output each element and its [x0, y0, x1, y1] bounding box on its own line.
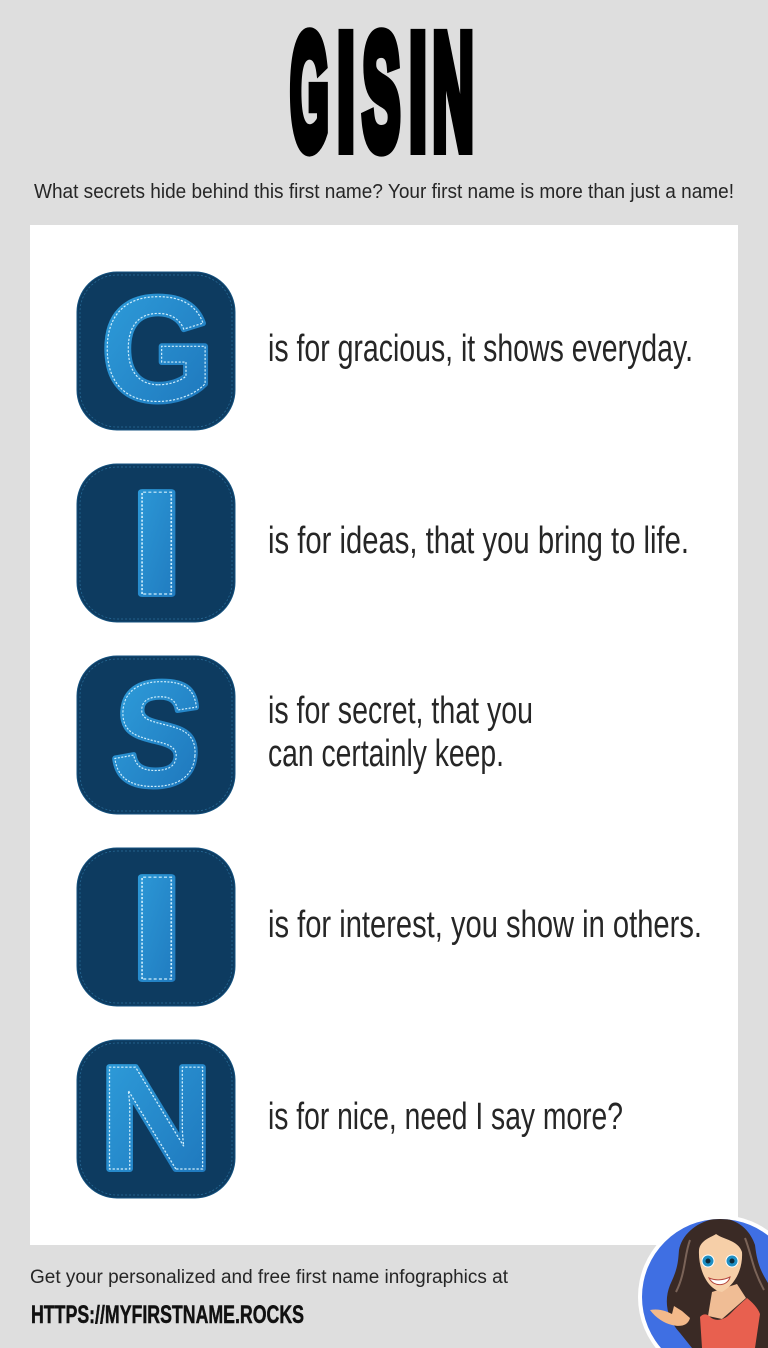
footer text: Get your personalized and free first name infographics at — [30, 1267, 509, 1288]
avatar — [638, 1215, 768, 1348]
row: I — [77, 460, 689, 626]
icon: letter S: S — [107, 651, 208, 816]
row: I second — [77, 845, 702, 1011]
subtitle: What secrets hide behind this first name? Your first name is more than just a name! — [34, 181, 734, 203]
title: N — [432, 0, 474, 183]
row: N — [77, 1036, 623, 1201]
panel: letters — [30, 225, 738, 1245]
icon: letter S — [77, 651, 235, 816]
title: S — [362, 0, 400, 183]
icon: letter I second — [77, 845, 235, 1011]
title — [290, 0, 474, 184]
row: S — [77, 651, 533, 816]
icon: letter G: G — [101, 267, 214, 432]
icon: letter G: G — [101, 267, 214, 432]
text: S lines: is for secret, that you — [268, 690, 533, 732]
icon: letter I second: I — [128, 845, 185, 1011]
icon: letter I: I — [128, 460, 185, 626]
text: S lines — [268, 690, 533, 775]
icon: letter I — [77, 460, 235, 626]
row: G — [77, 267, 693, 432]
footer url: HTTPS://MYFIRSTNAME.ROCKS — [31, 1301, 304, 1329]
icon: letter S: S — [107, 651, 208, 816]
icon: letter N: N — [99, 1036, 213, 1201]
title: I — [409, 2, 427, 184]
text: N line: is for nice, need I say more? — [268, 1096, 623, 1138]
icon: letter I: I — [128, 460, 185, 626]
text: S lines: can certainly keep. — [268, 733, 504, 775]
title: G — [290, 1, 329, 183]
title: I — [337, 2, 355, 184]
icon: letter N: N — [99, 1036, 213, 1201]
icon: letter I second: I — [128, 845, 185, 1011]
